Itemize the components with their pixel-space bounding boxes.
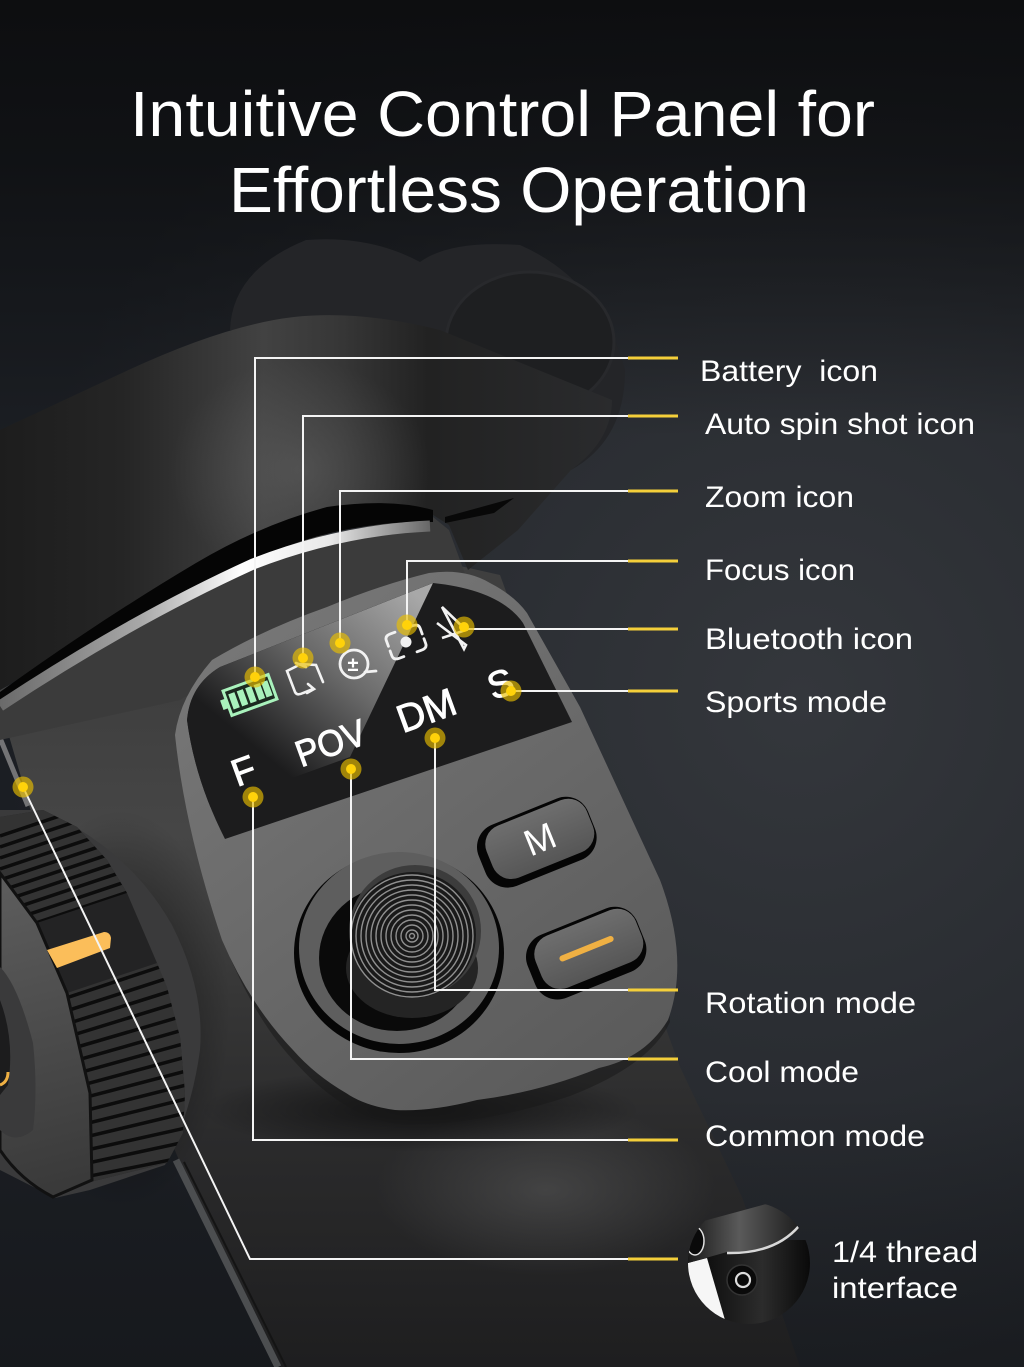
wheel front face (0, 873, 92, 1197)
panel surface (175, 572, 677, 1110)
icon: bluetooth (437, 607, 466, 649)
wheel dark band (0, 810, 185, 1182)
lower knurl (68, 963, 185, 1181)
collar under ring (0, 517, 468, 740)
label: thread: interface (832, 1272, 958, 1305)
joystick (294, 852, 504, 1053)
icon: focus (385, 624, 427, 660)
mode label DM: DM (391, 681, 462, 742)
joystick outer ring (299, 852, 499, 1044)
label: thread: 1/4 thread (832, 1236, 978, 1269)
inset base (688, 1240, 812, 1325)
wheel backing ring (0, 810, 201, 1198)
label: rotation: Rotation mode (705, 987, 916, 1020)
cylinder highlight (170, 360, 430, 580)
mode label S: S (482, 661, 520, 709)
icon: zoom (340, 650, 376, 678)
inset hole (727, 1265, 757, 1295)
chrome ring (0, 526, 430, 706)
title: Intuitive Control Panel for (130, 78, 875, 150)
handle highlight (376, 1105, 716, 1275)
black ring groove (0, 503, 433, 704)
panel shadow (178, 700, 670, 1124)
callout yellow ends (628, 358, 678, 1259)
mode label POV: POV (290, 712, 372, 775)
ghosted gimbal arm (230, 239, 625, 470)
mode label F: F (226, 748, 262, 795)
label: focus: Focus icon (705, 554, 855, 587)
joystick cap (349, 865, 481, 998)
label: zoom: Zoom icon (705, 481, 854, 514)
title: Effortless Operation (229, 154, 809, 226)
inset white reflection (688, 1258, 725, 1320)
joystick well (319, 885, 475, 1031)
callout leader lines (23, 358, 630, 1259)
motor cylinder (0, 315, 612, 690)
M button (470, 790, 604, 895)
ghosted dial (446, 272, 614, 412)
thread interface inset (686, 1203, 812, 1325)
label: sports: Sports mode (705, 686, 887, 719)
M button: M (518, 815, 562, 864)
display screen (187, 583, 572, 839)
joystick stem (346, 918, 478, 1018)
upper knurl (0, 810, 127, 922)
icon: zoom: ± (348, 654, 359, 676)
label: bluetooth: Bluetooth icon (705, 623, 913, 656)
handle shadow (200, 1068, 640, 1152)
side wheel (0, 810, 201, 1198)
mode button with yellow bar (519, 900, 654, 1007)
icon: auto spin (287, 663, 323, 694)
lens centre (0, 1000, 10, 1095)
yellow accent on lens (0, 1072, 8, 1085)
label: battery: Battery icon (700, 355, 878, 388)
label: thread (832, 1236, 978, 1305)
connector slot (445, 498, 514, 523)
inset side port (686, 1227, 704, 1255)
handle edge highlight (0, 738, 286, 1367)
joystick outer ring shadow (294, 853, 504, 1053)
icon: battery (217, 675, 277, 717)
control panel (175, 572, 677, 1124)
gimbal handle body (0, 530, 800, 1367)
title (130, 78, 875, 226)
wheel lens recess (0, 967, 36, 1138)
inset silver seam (727, 1226, 799, 1253)
callout labels (700, 355, 978, 1305)
label: common: Common mode (705, 1120, 925, 1153)
inset upper collar (688, 1203, 802, 1263)
label: cool: Cool mode (705, 1056, 859, 1089)
callout marker dots (12, 614, 522, 808)
body shadow behind wheel (10, 810, 230, 1210)
wheel yellow marker (47, 932, 111, 968)
screen gloss (187, 583, 433, 815)
label: auto spin: Auto spin shot icon (705, 408, 975, 441)
